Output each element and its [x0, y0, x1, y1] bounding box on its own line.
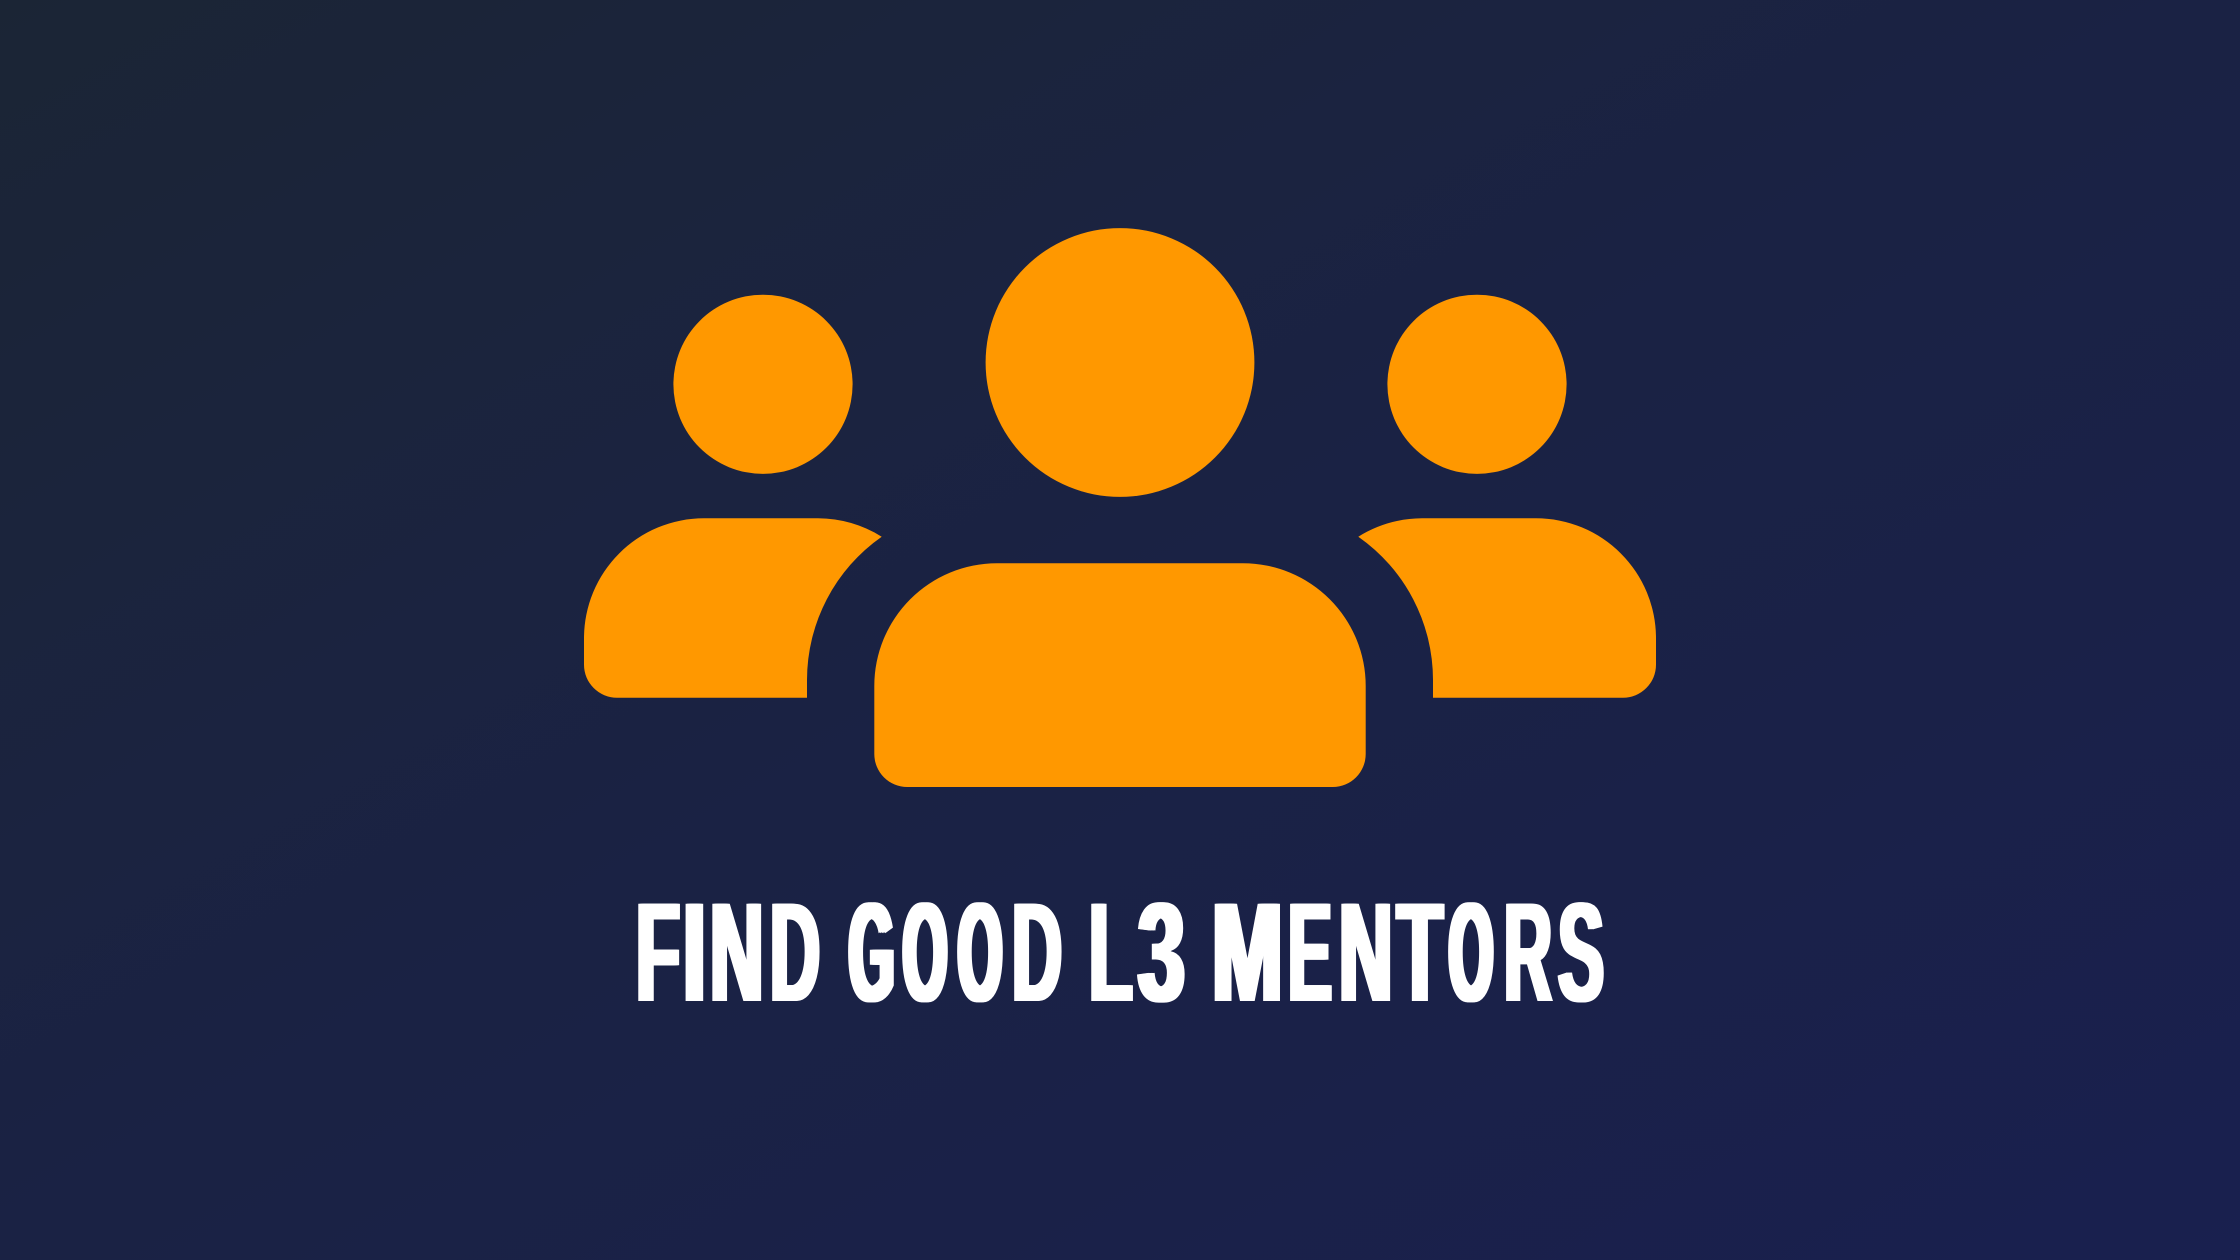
title: N	[710, 873, 764, 1031]
icon: centre person	[874, 228, 1366, 787]
title: L	[1089, 873, 1133, 1031]
title: O	[903, 873, 947, 1031]
title: 3	[1138, 873, 1185, 1031]
title: M	[1212, 873, 1282, 1031]
title: E	[1288, 873, 1332, 1031]
title: O	[958, 873, 1002, 1031]
title: R	[1504, 873, 1552, 1031]
title: G	[849, 873, 894, 1031]
title: F	[636, 873, 680, 1031]
icon: right person	[1358, 295, 1656, 698]
title: I	[683, 873, 706, 1031]
icon: left person	[584, 295, 882, 698]
title	[636, 873, 1604, 1031]
title: D	[1012, 873, 1062, 1031]
title: O	[1449, 873, 1493, 1031]
title: D	[770, 873, 820, 1031]
title: T	[1397, 873, 1443, 1031]
title: S	[1558, 873, 1604, 1031]
title: N	[1339, 873, 1393, 1031]
